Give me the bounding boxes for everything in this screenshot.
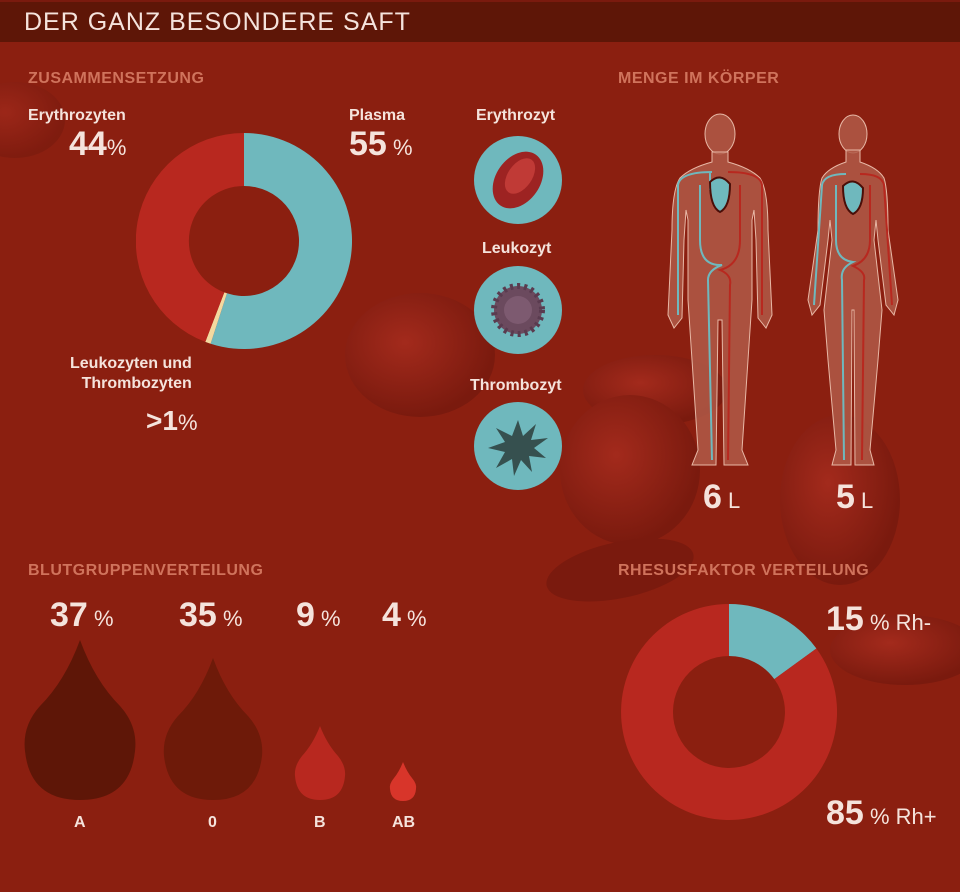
- title: DER GANZ BESONDERE SAFT: [24, 8, 411, 36]
- label leukozyten: Leukozyten und: [70, 355, 192, 372]
- label >1%: >1%: [146, 405, 198, 436]
- cell: leukozyt: [474, 240, 562, 354]
- label erythrozyten: Erythrozyten: [28, 107, 126, 124]
- cell: thrombozyt: Thrombozyt: [470, 377, 562, 394]
- blood group drops: [24, 596, 427, 831]
- label plasma: 55 %: [349, 125, 413, 163]
- heading: rhesus: RHESUSFAKTOR VERTEILUNG: [618, 562, 869, 579]
- label leukozyten: [70, 355, 192, 392]
- figure: man: [668, 114, 772, 466]
- label plasma: Plasma: [349, 107, 405, 124]
- donut: composition: [136, 133, 352, 349]
- label 15% Rh-: 15 % Rh-: [826, 600, 931, 638]
- header bar: [0, 0, 960, 42]
- label erythrozyten: 44%: [69, 125, 126, 163]
- heading: zusammensetzung: ZUSAMMENSETZUNG: [28, 70, 204, 87]
- label plasma: [349, 107, 413, 163]
- heading: blutgruppen: BLUTGRUPPENVERTEILUNG: [28, 562, 263, 579]
- cell: erythrozyt: Erythrozyt: [476, 107, 555, 124]
- blood group drops: 0: [208, 814, 217, 831]
- cell: leukozyt: Leukozyt: [482, 240, 551, 257]
- label leukozyten: Thrombozyten: [82, 375, 192, 392]
- donut: rhesus: [621, 604, 837, 820]
- label 85% Rh+: 85 % Rh+: [826, 794, 937, 832]
- blood group drops: AB: [392, 814, 415, 831]
- label 5 L: 5 L: [836, 478, 873, 516]
- blood group drops: 9 %: [296, 596, 341, 634]
- blood group drops: B: [314, 814, 326, 831]
- label 6 L: 6 L: [703, 478, 740, 516]
- blood group drops: 4 %: [382, 596, 427, 634]
- heading: menge im körper: MENGE IM KÖRPER: [618, 70, 779, 87]
- blood group drops: 37 %: [50, 596, 114, 634]
- label erythrozyten: [28, 107, 126, 163]
- blood group drops: A: [74, 814, 86, 831]
- cell: erythrozyt: [474, 107, 562, 224]
- cell: thrombozyt: [470, 377, 562, 490]
- figure: woman: [808, 114, 898, 466]
- blood group drops: 35 %: [179, 596, 243, 634]
